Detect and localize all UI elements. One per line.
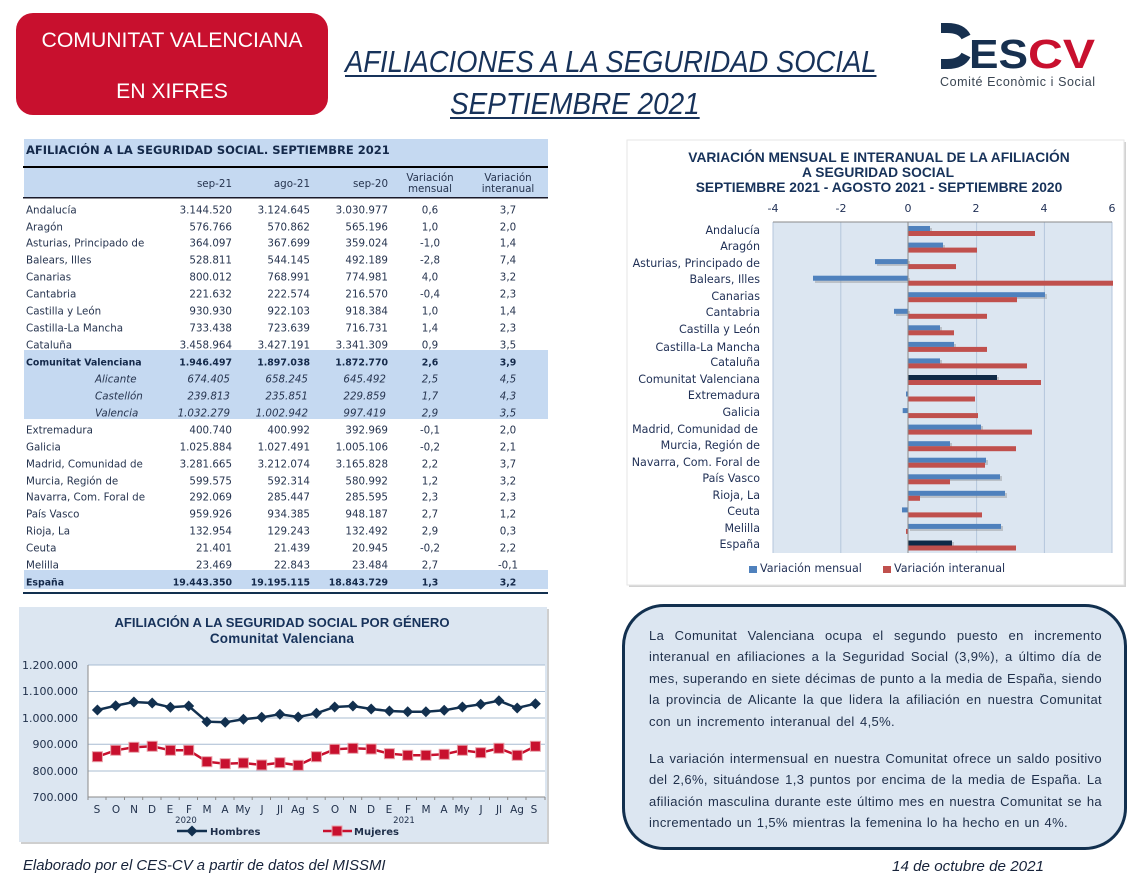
table rows: 733.438 [189,322,232,334]
table rows continued: 2,2 [422,458,438,470]
rows: provincias [94,374,516,420]
table rows: Castilla y León [26,306,101,318]
legend: Mujeres [354,827,399,838]
category labels: Cataluña [710,356,760,369]
table rows continued: Murcia, Región de [26,476,118,488]
x axis labels: N [349,804,357,816]
table rows continued: 21.439 [274,542,310,554]
y axis labels: 1.000.000 [22,712,78,725]
row: España: 3,2 [500,578,516,588]
table rows continued: 400.992 [267,424,310,436]
y axis labels: 1.200.000 [22,659,78,672]
text block: commentary paragraphs: interanual en afiliaciones a la Seguridad Social (3,9%), a último día de [649,649,1102,664]
x axis labels: E [167,804,173,816]
rows: provincias: 1.032.279 [178,408,230,420]
table rows continued: 2,7 [422,508,438,520]
table rows: -0,4 [420,288,440,300]
rows: provincias: 2,5 [422,374,438,386]
table rows continued: Galicia [26,442,61,454]
table rows: 1,4 [500,306,516,318]
axis labels: 4 [1040,202,1048,215]
bars: variación mensual [813,226,1045,529]
chart title: Comunitat Valenciana [210,631,354,646]
category labels: Andalucía [705,224,760,237]
category labels: Cantabria [706,306,760,319]
table rows: 1,4 [500,238,516,250]
table rows continued: -0,1 [498,560,518,572]
category labels [632,224,760,551]
table rows: 216.570 [345,288,388,300]
table rows: 222.574 [267,288,310,300]
table rows continued: 2,1 [500,442,516,454]
table rows: 930.930 [189,306,232,318]
y axis labels: 700.000 [32,791,78,804]
table rows: 544.145 [267,254,310,266]
table rows continued: 21.401 [196,542,232,554]
category labels: Madrid, Comunidad de [632,423,758,436]
table rows: Asturias, Principado de [26,238,144,250]
table rows continued: País Vasco [26,508,79,520]
x axis labels: 2020 [175,816,197,826]
x axis labels [94,804,538,826]
table rows: Andalucía [26,204,77,216]
axis labels: -2 [836,202,846,215]
text block: commentary paragraphs: incrementado un 1,5% mientras la femenina lo ha hecho en un 4%. [649,815,1068,830]
table rows: 492.189 [345,254,388,266]
table heading: AFILIACIÓN A LA SEGURIDAD SOCIAL. SEPTIEMBRE 2021 [26,142,390,157]
table rows continued: 3.165.828 [336,458,388,470]
x axis labels: J [478,804,483,816]
table rows continued [26,424,518,572]
table rows continued: 1,2 [500,508,516,520]
x axis labels: D [367,804,375,816]
column headers: interanual [482,183,534,195]
axis labels [768,202,1116,215]
column headers: Variación [406,172,454,184]
column headers: ago-21 [274,178,310,190]
category labels: Comunitat Valenciana [638,373,760,386]
table rows continued: 934.385 [267,508,310,520]
line: Mujeres [97,746,535,765]
table rows: Cantabria [26,288,76,300]
table rows continued: Ceuta [26,542,56,554]
table rows continued: 285.447 [267,492,310,504]
table rows: 7,4 [500,254,516,266]
table rows: 723.639 [267,322,310,334]
axis labels: 0 [904,202,912,215]
table rows: 1,4 [422,322,438,334]
rows: provincias: 239.813 [187,390,230,402]
column headers: sep-20 [353,178,388,190]
category labels: Canarias [711,290,760,303]
rows: provincias: 3,5 [500,408,516,420]
title: AFILIACIONES A LA SEGURIDAD SOCIAL [345,44,876,79]
bars: variación interanual [906,231,1113,550]
table rows: 800.012 [189,272,232,284]
category labels: Aragón [720,240,760,253]
table rows continued: 2,0 [500,424,516,436]
x axis labels: E [386,804,392,816]
x axis labels: N [130,804,138,816]
row: Comunitat Valenciana [26,358,516,368]
table rows: 367.699 [267,238,310,250]
table rows: 0,6 [422,204,438,216]
x axis labels: S [531,804,538,816]
rows: provincias: 658.245 [265,374,308,386]
table rows: 528.811 [189,254,232,266]
rows: provincias: 1.002.942 [256,408,308,420]
x axis labels: Jl [276,804,283,816]
table rows continued: 1.005.106 [336,442,388,454]
table rows: 922.103 [267,306,310,318]
text block: commentary paragraphs: la provincia de Alicante la que lidera la afiliación en nuestra Comunitat [649,692,1102,707]
table rows continued: 3.281.665 [180,458,232,470]
table rows: Balears, Illes [26,254,91,266]
table rows continued: 592.314 [267,476,310,488]
table rows continued: 2,7 [422,560,438,572]
category labels: Melilla [724,522,760,535]
x axis labels: O [331,804,339,816]
column headers: sep-21 [197,178,232,190]
table rows continued: 948.187 [345,508,388,520]
table rows continued: -0,2 [420,442,440,454]
badge: Comunitat Valenciana en xifres: EN XIFRES [116,80,228,103]
row: Comunitat Valenciana: 1.946.497 [179,358,232,368]
table rows continued: 1.027.491 [258,442,310,454]
rows: provincias: 674.405 [187,374,230,386]
table rows continued: 392.969 [345,424,388,436]
table rows continued: 285.595 [345,492,388,504]
table rows: 3,7 [500,204,516,216]
table rows continued: 23.484 [352,560,388,572]
rows: provincias: 2,9 [422,408,438,420]
rows: provincias: 4,3 [500,390,516,402]
table rows continued: Madrid, Comunidad de [26,458,143,470]
legend: Hombres [210,827,261,838]
badge: Comunitat Valenciana en xifres: COMUNITAT VALENCIANA [42,29,302,52]
category labels: Galicia [722,406,760,419]
table rows: 716.731 [345,322,388,334]
x axis labels: S [94,804,101,816]
footer: date: 14 de octubre de 2021 [892,858,1044,875]
table rows continued: 599.575 [189,476,232,488]
table rows: Castilla-La Mancha [26,322,123,334]
x axis labels: Jl [495,804,502,816]
row: Comunitat Valenciana: 1.897.038 [257,358,310,368]
category labels: Navarra, Com. Foral de [632,456,760,469]
badge: Comunitat Valenciana en xifres [16,13,328,115]
row: España: 1,3 [422,578,438,588]
table rows: 774.981 [345,272,388,284]
logo: CES-CV [940,23,1096,89]
table rows: 4,0 [422,272,438,284]
row: España: 18.843.729 [329,578,388,588]
table rows continued: 959.926 [189,508,232,520]
table rows: 3.030.977 [336,204,388,216]
chart title: AFILIACIÓN A LA SEGURIDAD SOCIAL POR GÉNERO [114,615,450,630]
table rows continued: 3.212.074 [258,458,310,470]
rows: provincias: Alicante [94,374,137,386]
row: España: 19.195.115 [251,578,310,588]
table rows continued: 292.069 [189,492,232,504]
x axis labels: F [186,804,192,816]
y axis labels [22,659,78,804]
table rows continued: 2,9 [422,526,438,538]
table rows continued: 580.992 [345,476,388,488]
panel: bar chart variación mensual e interanual [626,140,1126,587]
table rows continued: Navarra, Com. Foral de [26,492,145,504]
column headers: mensual [408,183,452,195]
category labels: Castilla y León [679,323,760,336]
table rows: Aragón [26,222,63,234]
column headers: Variación [484,172,532,184]
table rows continued: 3,2 [500,476,516,488]
row: España [26,578,516,588]
category labels: Murcia, Región de [661,439,760,452]
table rows: 3,5 [500,340,516,352]
text block: commentary paragraphs: La Comunitat Valenciana ocupa el segundo puesto en incremento [649,628,1102,643]
axis labels: 6 [1108,202,1116,215]
logo: CES-CV: CV [1028,31,1096,77]
category labels: Castilla-La Mancha [655,341,760,354]
table rows continued: Extremadura [26,424,93,436]
category labels: Ceuta [727,505,760,518]
table rows: -1,0 [420,238,440,250]
x axis labels: 2021 [393,816,415,826]
table: afiliación por comunidad [23,139,548,594]
x axis labels: J [259,804,264,816]
table rows continued: 22.843 [274,560,310,572]
table rows: 2,3 [500,288,516,300]
table rows [26,204,516,352]
table rows: 576.766 [189,222,232,234]
legend [749,562,1005,575]
table rows: 768.991 [267,272,310,284]
title [344,44,876,121]
rows: provincias: Castellón [95,390,143,402]
column headers [197,172,534,195]
x axis labels: M [421,804,431,816]
y axis labels: 800.000 [32,765,78,778]
x axis labels: O [112,804,120,816]
chart title [114,615,450,646]
table rows: 3,2 [500,272,516,284]
table rows continued: 132.954 [189,526,232,538]
table rows: 1,0 [422,222,438,234]
category labels: Balears, Illes [689,273,760,286]
row: España: España [26,578,64,588]
text block: commentary paragraphs: del 2,6%, situándose 1,3 puntos por encima de la media de España. La [649,772,1102,787]
x axis labels: A [221,804,229,816]
legend: Variación interanual [894,562,1005,575]
legend [177,827,399,838]
table rows continued: -0,1 [420,424,440,436]
table rows: 565.196 [345,222,388,234]
chart title [688,148,1070,195]
text block: commentary paragraphs: La variación intermensual en nuestra Comunitat ofrece un saldo positivo [649,751,1102,766]
table rows continued: 0,3 [500,526,516,538]
row: Comunitat Valenciana: Comunitat Valenciana [26,358,142,368]
table rows: 364.097 [189,238,232,250]
rows: provincias: 997.419 [343,408,386,420]
bar shadows [815,228,1047,547]
text block: commentary paragraphs: afiliación masculina durante este último mes en nuestra Comunitat se ha [649,794,1102,809]
axis labels: -4 [768,202,778,215]
axis labels: 2 [972,202,980,215]
table rows continued: 2,3 [422,492,438,504]
panel: text commentary [622,604,1127,850]
chart title: SEPTIEMBRE 2021 - AGOSTO 2021 - SEPTIEMBRE 2020 [696,180,1063,195]
rows: provincias: 645.492 [343,374,386,386]
table rows continued: 129.243 [267,526,310,538]
category labels: Rioja, La [712,489,760,502]
logo: CES-CV: ES [969,31,1028,77]
x axis labels: Ag [510,804,524,816]
table rows continued: Rioja, La [26,526,70,538]
table rows: 1,0 [422,306,438,318]
row: Comunitat Valenciana: 3,9 [500,358,516,368]
table rows continued: 400.740 [189,424,232,436]
table rows: Canarias [26,272,71,284]
table rows: Cataluña [26,340,72,352]
x axis labels: S [313,804,320,816]
x axis labels: F [405,804,411,816]
table rows: -2,8 [420,254,440,266]
table rows: 3.341.309 [336,340,388,352]
table rows continued: Melilla [26,560,59,572]
table rows: 359.024 [345,238,388,250]
footer: source: Elaborado por el CES-CV a partir de datos del MISSMI [23,858,386,874]
line: Hombres [97,701,535,722]
chart title: A SEGURIDAD SOCIAL [802,165,954,180]
table rows continued: 20.945 [352,542,388,554]
table rows continued: 1,2 [422,476,438,488]
table rows: 2,3 [500,322,516,334]
text block: commentary paragraphs: mes, superando en siete décimas de punto a la media de España, siendo [649,671,1102,686]
table rows continued: 132.492 [345,526,388,538]
x axis labels: My [235,804,251,816]
table rows: 3.458.964 [180,340,232,352]
chart title: VARIACIÓN MENSUAL E INTERANUAL DE LA AFILIACIÓN [688,148,1070,165]
table rows: 221.632 [189,288,232,300]
x axis labels: M [202,804,212,816]
table rows continued: 2,3 [500,492,516,504]
y axis labels: 900.000 [32,738,78,751]
category labels: País Vasco [702,472,760,485]
x axis labels: A [440,804,448,816]
legend: Variación mensual [760,562,862,575]
category labels: España [720,538,760,551]
rows: provincias: Valencia [95,408,138,420]
table rows continued: -0,2 [420,542,440,554]
x axis labels: D [148,804,156,816]
table rows: 2,0 [500,222,516,234]
table rows: 0,9 [422,340,438,352]
table rows: 3.124.645 [258,204,310,216]
table rows: 918.384 [345,306,388,318]
text block: commentary paragraphs: con un incremento interanual del 4,5%. [649,714,895,729]
row: España: 19.443.350 [173,578,232,588]
rows: provincias: 4,5 [500,374,516,386]
bars: Comunitat Valenciana y España [908,375,997,546]
row: Comunitat Valenciana: 2,6 [422,358,439,368]
x axis labels: My [454,804,470,816]
rows: provincias: 235.851 [265,390,308,402]
title: SEPTIEMBRE 2021 [450,86,700,121]
row: Comunitat Valenciana: 1.872.770 [335,358,388,368]
table rows continued: 1.025.884 [180,442,232,454]
rows: provincias: 229.859 [343,390,386,402]
table rows: 3.144.520 [180,204,232,216]
rows: provincias: 1,7 [422,390,439,402]
table rows: 570.862 [267,222,310,234]
logo: CES-CV: Comité Econòmic i Social [940,75,1095,89]
table rows continued: 3,7 [500,458,516,470]
table rows continued: 23.469 [196,560,232,572]
category labels: Asturias, Principado de [633,257,760,270]
category labels: Extremadura [688,389,760,402]
table rows continued: 2,2 [500,542,516,554]
y axis labels: 1.100.000 [22,685,78,698]
table rows: 3.427.191 [258,340,310,352]
x axis labels: Ag [291,804,305,816]
